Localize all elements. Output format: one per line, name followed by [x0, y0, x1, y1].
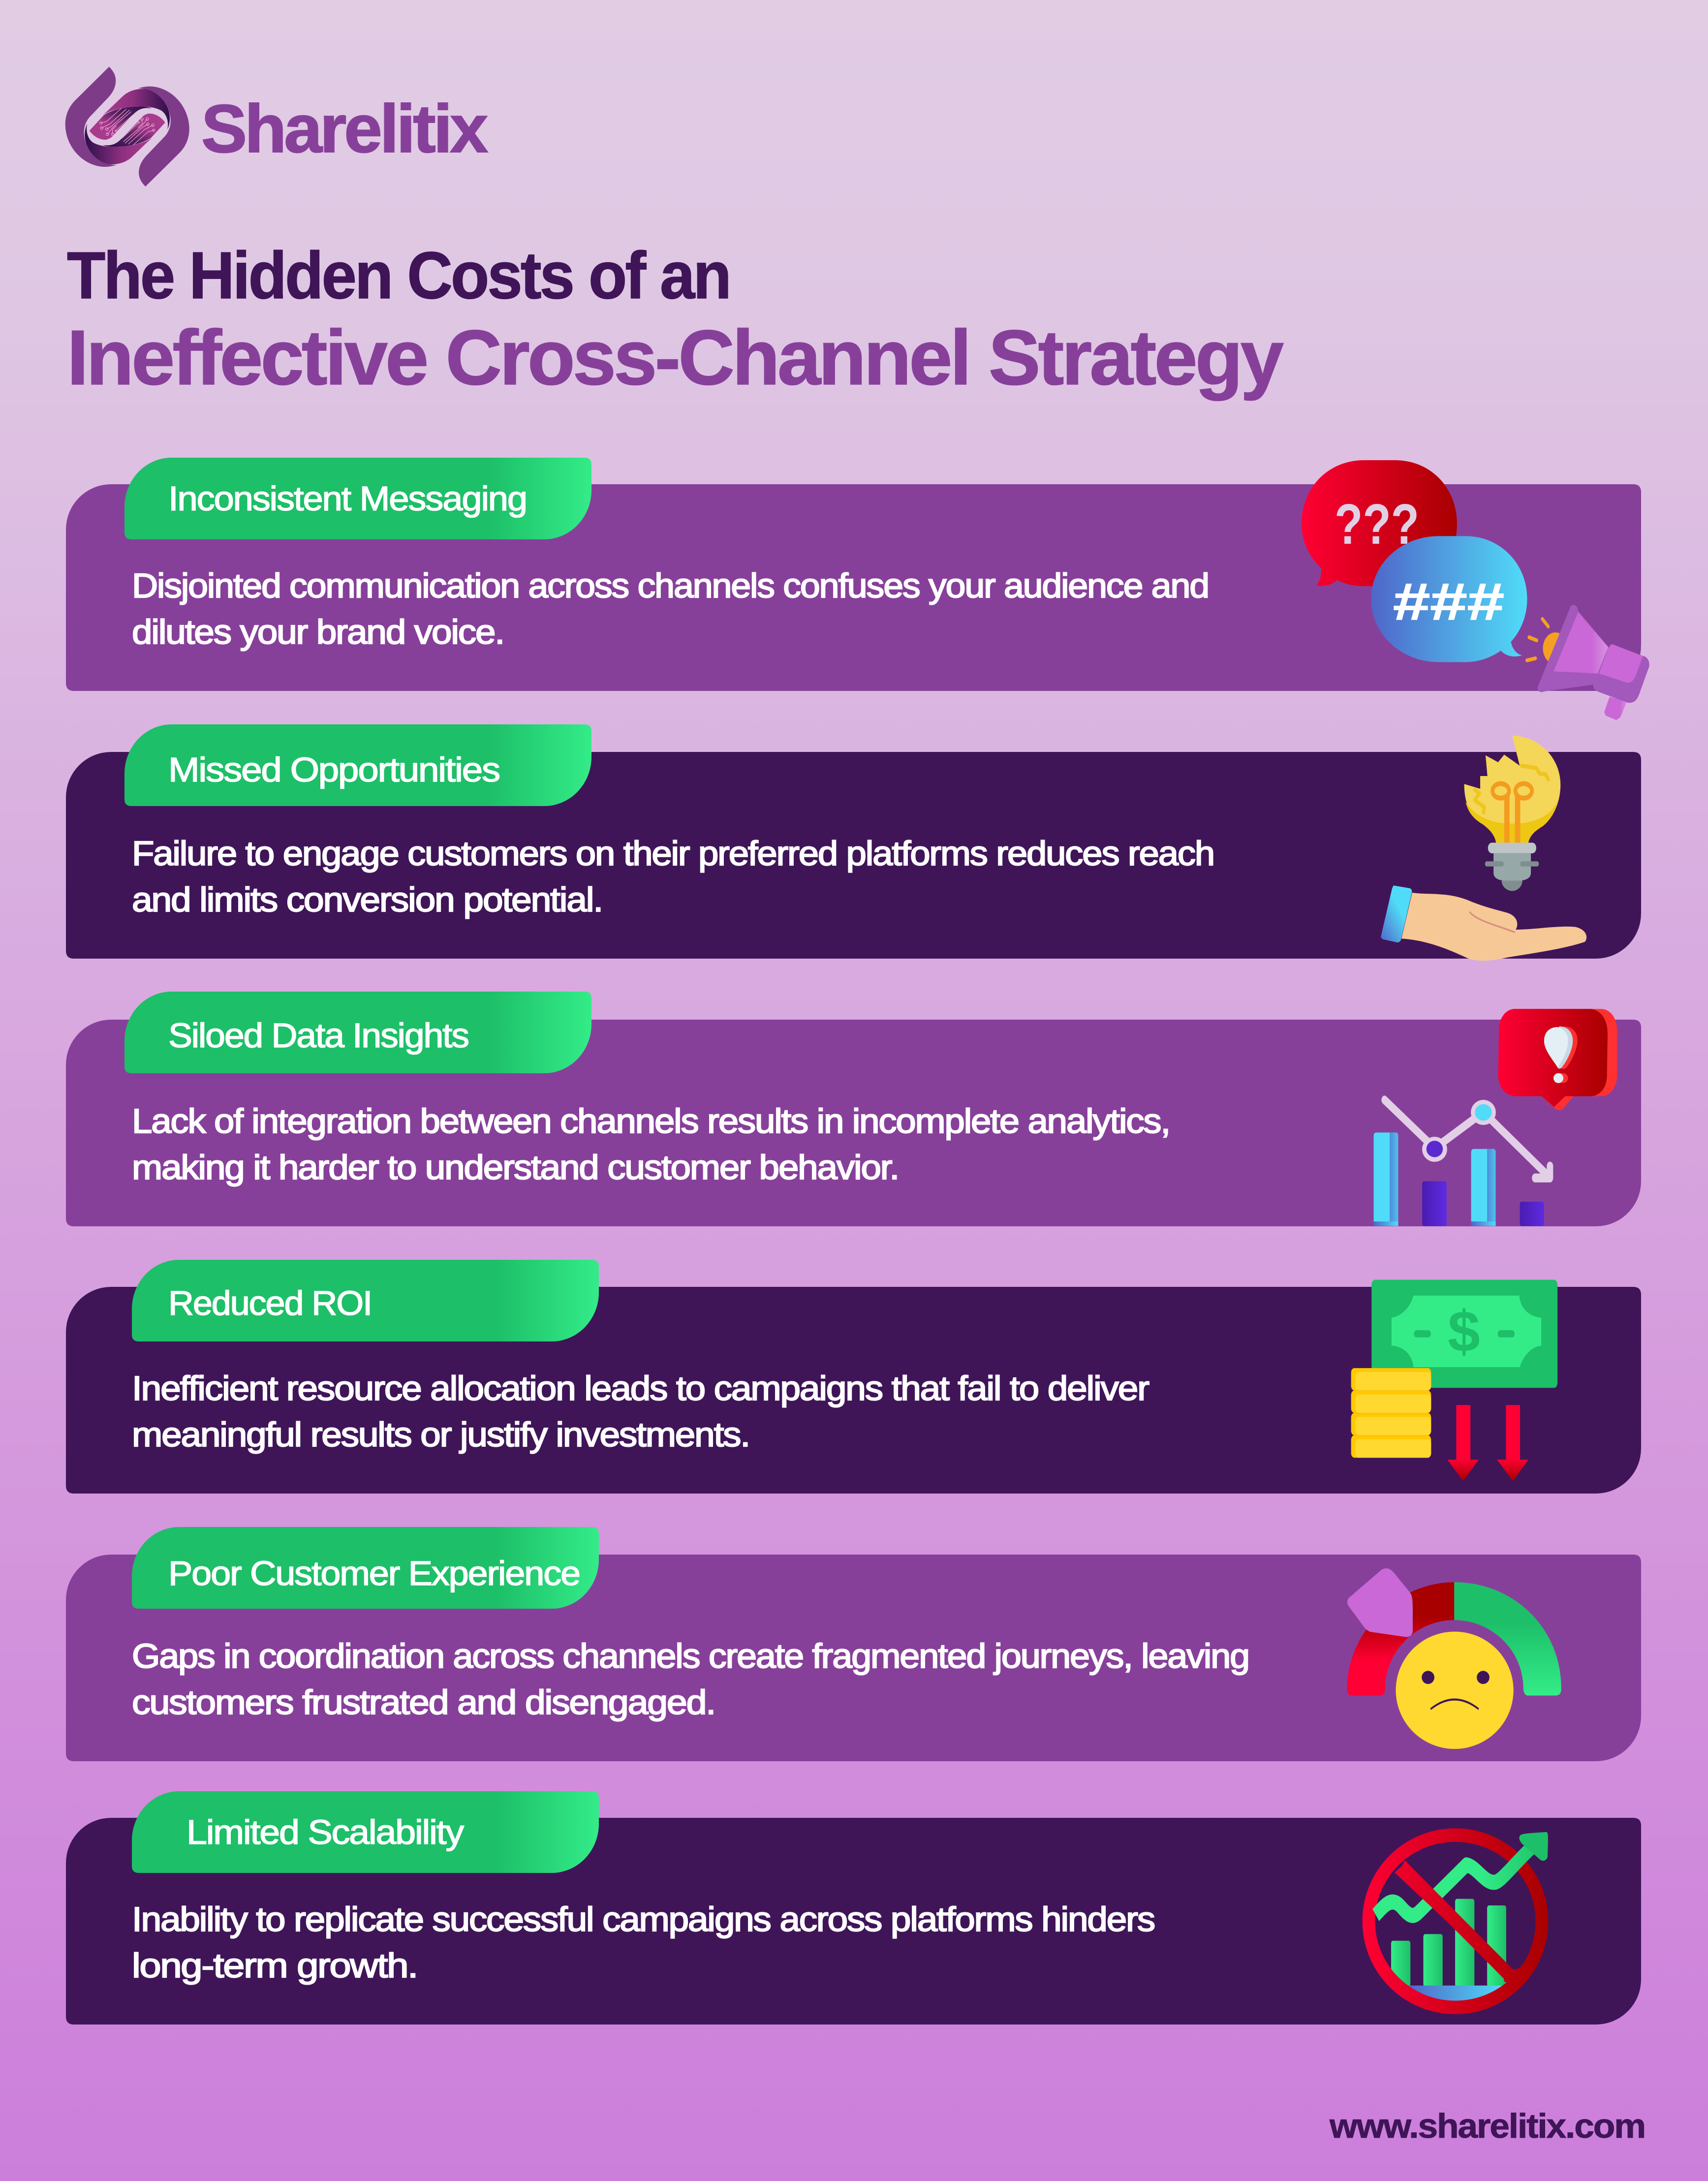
- description: [132, 1900, 1154, 1985]
- description: dilutes your brand voice.: [132, 613, 504, 651]
- footer website: www.sharelitix.com: [1329, 2107, 1645, 2145]
- heading tab: Limited Scalability: [186, 1813, 464, 1851]
- icon: broken light bulb over hand: [1381, 736, 1586, 961]
- icon: cash, coins and down arrows: $: [1448, 1299, 1480, 1364]
- description: meaningful results or justify investments.: [132, 1415, 749, 1454]
- description: Failure to engage customers on their preferred platforms reduces reach: [132, 834, 1214, 872]
- logo wordmark: Sharelitix: [201, 91, 488, 167]
- title line 2: Ineffective Cross-Channel Strategy: [67, 314, 1284, 401]
- alert bubble: [1498, 1009, 1617, 1110]
- heading tab: [124, 992, 591, 1073]
- description: [132, 1369, 1149, 1454]
- icon: speech bubbles and megaphone: ???: [1335, 492, 1419, 556]
- icon: speech bubbles and megaphone: ###: [1392, 573, 1503, 631]
- description: [132, 1102, 1170, 1186]
- icon: prohibited growth chart: [1363, 1828, 1548, 2014]
- heading tab: [124, 724, 591, 806]
- title line 1: The Hidden Costs of an: [67, 238, 730, 312]
- icon: cash, coins and down arrows: [1351, 1280, 1557, 1481]
- panel: Inconsistent Messaging: [66, 458, 1641, 691]
- icon: sad face satisfaction gauge: [1347, 1568, 1561, 1749]
- description: [132, 834, 1214, 919]
- heading tab: [132, 1791, 599, 1873]
- description: long-term growth.: [132, 1946, 417, 1985]
- heading tab: [132, 1260, 599, 1341]
- heading tab: Missed Opportunities: [168, 750, 499, 789]
- description: [132, 1637, 1249, 1721]
- description: Inefficient resource allocation leads to campaigns that fail to deliver: [132, 1369, 1149, 1407]
- bars: [1374, 1132, 1544, 1226]
- heading tab: Poor Customer Experience: [168, 1554, 580, 1592]
- logo: Sharelitix: [65, 67, 488, 187]
- panel: Siloed Data Insights: [66, 992, 1641, 1226]
- description: [132, 566, 1209, 651]
- title: [67, 238, 1284, 401]
- description: making it harder to understand customer behavior.: [132, 1148, 899, 1186]
- heading tab: [132, 1527, 599, 1609]
- icon: declining bar chart with alert: [1374, 1009, 1617, 1226]
- description: Lack of integration between channels results in incomplete analytics,: [132, 1102, 1170, 1140]
- description: Gaps in coordination across channels create fragmented journeys, leaving: [132, 1637, 1249, 1675]
- panel: Reduced ROI: [66, 1260, 1641, 1494]
- description: Disjointed communication across channels confuses your audience and: [132, 566, 1209, 605]
- logo mark: [65, 67, 189, 187]
- description: and limits conversion potential.: [132, 880, 602, 919]
- description: Inability to replicate successful campaigns across platforms hinders: [132, 1900, 1154, 1938]
- heading tab: Siloed Data Insights: [168, 1016, 468, 1055]
- panel: Missed Opportunities: [66, 724, 1641, 959]
- description: customers frustrated and disengaged.: [132, 1683, 715, 1721]
- heading tab: Reduced ROI: [168, 1284, 372, 1322]
- heading tab: [124, 458, 591, 539]
- heading tab: Inconsistent Messaging: [168, 479, 527, 518]
- panel: Limited Scalability: [66, 1791, 1641, 2025]
- panel: Poor Customer Experience: [66, 1527, 1641, 1761]
- trend arrow: [1385, 1100, 1550, 1178]
- icon: speech bubbles and megaphone: [1302, 460, 1649, 720]
